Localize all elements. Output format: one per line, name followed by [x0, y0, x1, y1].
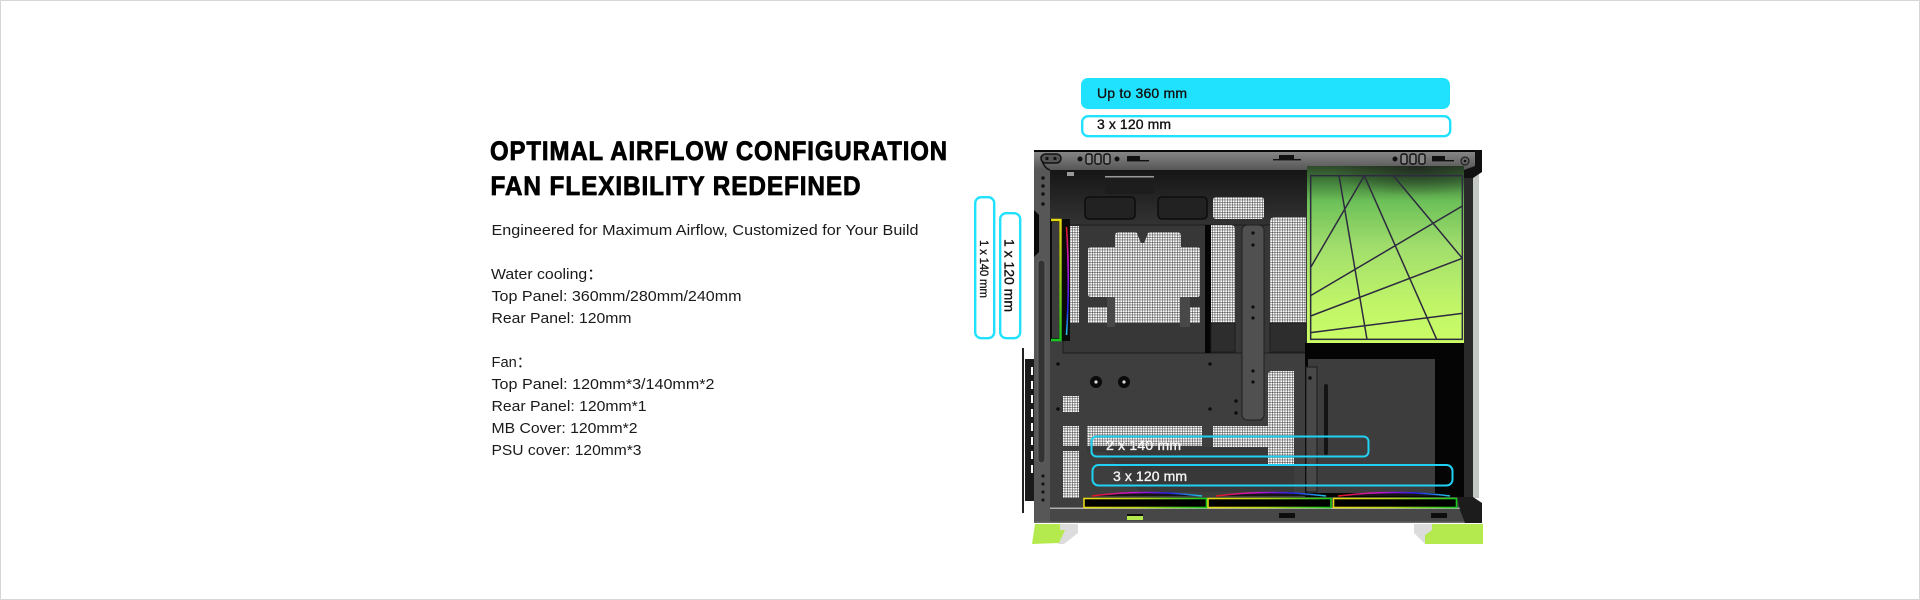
top bar	[1034, 150, 1482, 170]
top bar hardware	[1041, 154, 1469, 165]
case body	[1034, 150, 1473, 523]
darker lower tray pockets	[1211, 323, 1306, 352]
top fan size outline	[1082, 116, 1450, 136]
spec text block: Rear Panel: 120mm	[492, 310, 632, 327]
bottom case bar	[1034, 508, 1482, 523]
left foot	[1032, 524, 1078, 544]
spec text block	[491, 222, 918, 459]
spec text block: Top Panel: 360mm/280mm/240mm	[492, 288, 742, 305]
mesh column B	[1270, 217, 1306, 323]
side panel with green graphic	[1307, 166, 1464, 343]
PSU bracket	[1306, 367, 1328, 492]
dark lower chamber plate	[1087, 447, 1294, 492]
bottom 3 x 120 mm callout	[1092, 465, 1452, 486]
small perforations	[1067, 172, 1154, 178]
heading: OPTIMAL AIRFLOW CONFIGURATION	[490, 136, 948, 166]
rear 120 mm outline: 1 x 120 mm	[1002, 239, 1018, 312]
graphic line art	[1311, 176, 1462, 339]
bottom fan RGB arcs	[1092, 492, 1450, 496]
bottom 2 x 140 mm callout	[1092, 436, 1368, 456]
vertical plate	[1242, 225, 1264, 420]
top radiator size bar: Up to 360 mm	[1097, 85, 1187, 101]
spec text block: Water cooling：	[491, 266, 603, 283]
black slot	[1205, 225, 1211, 353]
upper chamber	[1050, 168, 1308, 225]
cable cutout shadow	[1105, 175, 1154, 194]
right glass edge	[1464, 170, 1479, 498]
upper chamber cutouts	[1085, 197, 1207, 219]
standoffs and holes	[1056, 362, 1238, 415]
right bottom corner	[1457, 497, 1482, 523]
motherboard tray	[1063, 225, 1305, 353]
left case wall	[1034, 150, 1050, 523]
spec text block: Engineered for Maximum Airflow, Customized for Your Build	[492, 222, 918, 239]
bottom 2 x 140 mm callout: 2 x 140 mm	[1106, 437, 1181, 453]
case lower mesh panels	[1063, 371, 1294, 498]
top mesh vent	[1213, 197, 1264, 219]
rear 120 mm outline	[1000, 213, 1020, 338]
mesh column A	[1211, 225, 1235, 323]
top fan size outline: 3 x 120 mm	[1097, 116, 1171, 132]
heading: FAN FLEXIBILITY REDEFINED	[490, 171, 862, 201]
rear fan frame	[1050, 219, 1070, 341]
rear 140 mm outline	[975, 197, 994, 338]
bottom 3 x 120 mm callout: 3 x 120 mm	[1113, 468, 1187, 484]
spec text block: PSU cover: 120mm*3	[492, 442, 642, 459]
spec text block: Fan：	[492, 354, 532, 371]
heading	[490, 136, 948, 201]
spec text block: Rear Panel: 120mm*1	[492, 398, 646, 415]
PSU cover	[1308, 359, 1435, 493]
rear 140 mm outline: 1 x 140 mm	[977, 240, 989, 298]
PSU black chamber	[1305, 343, 1464, 497]
tray center column	[1107, 297, 1190, 327]
top right corner	[1464, 150, 1482, 178]
spec text block: MB Cover: 120mm*2	[492, 420, 638, 437]
bottom fans	[1084, 498, 1456, 508]
PC case	[1034, 150, 1482, 523]
rear expansion bracket	[1022, 348, 1034, 513]
motherboard mesh	[1088, 232, 1200, 323]
spec text block: Top Panel: 120mm*3/140mm*2	[492, 376, 714, 393]
right foot	[1414, 524, 1483, 544]
tray mesh patches	[1070, 226, 1200, 323]
top radiator size bar	[1081, 78, 1450, 109]
